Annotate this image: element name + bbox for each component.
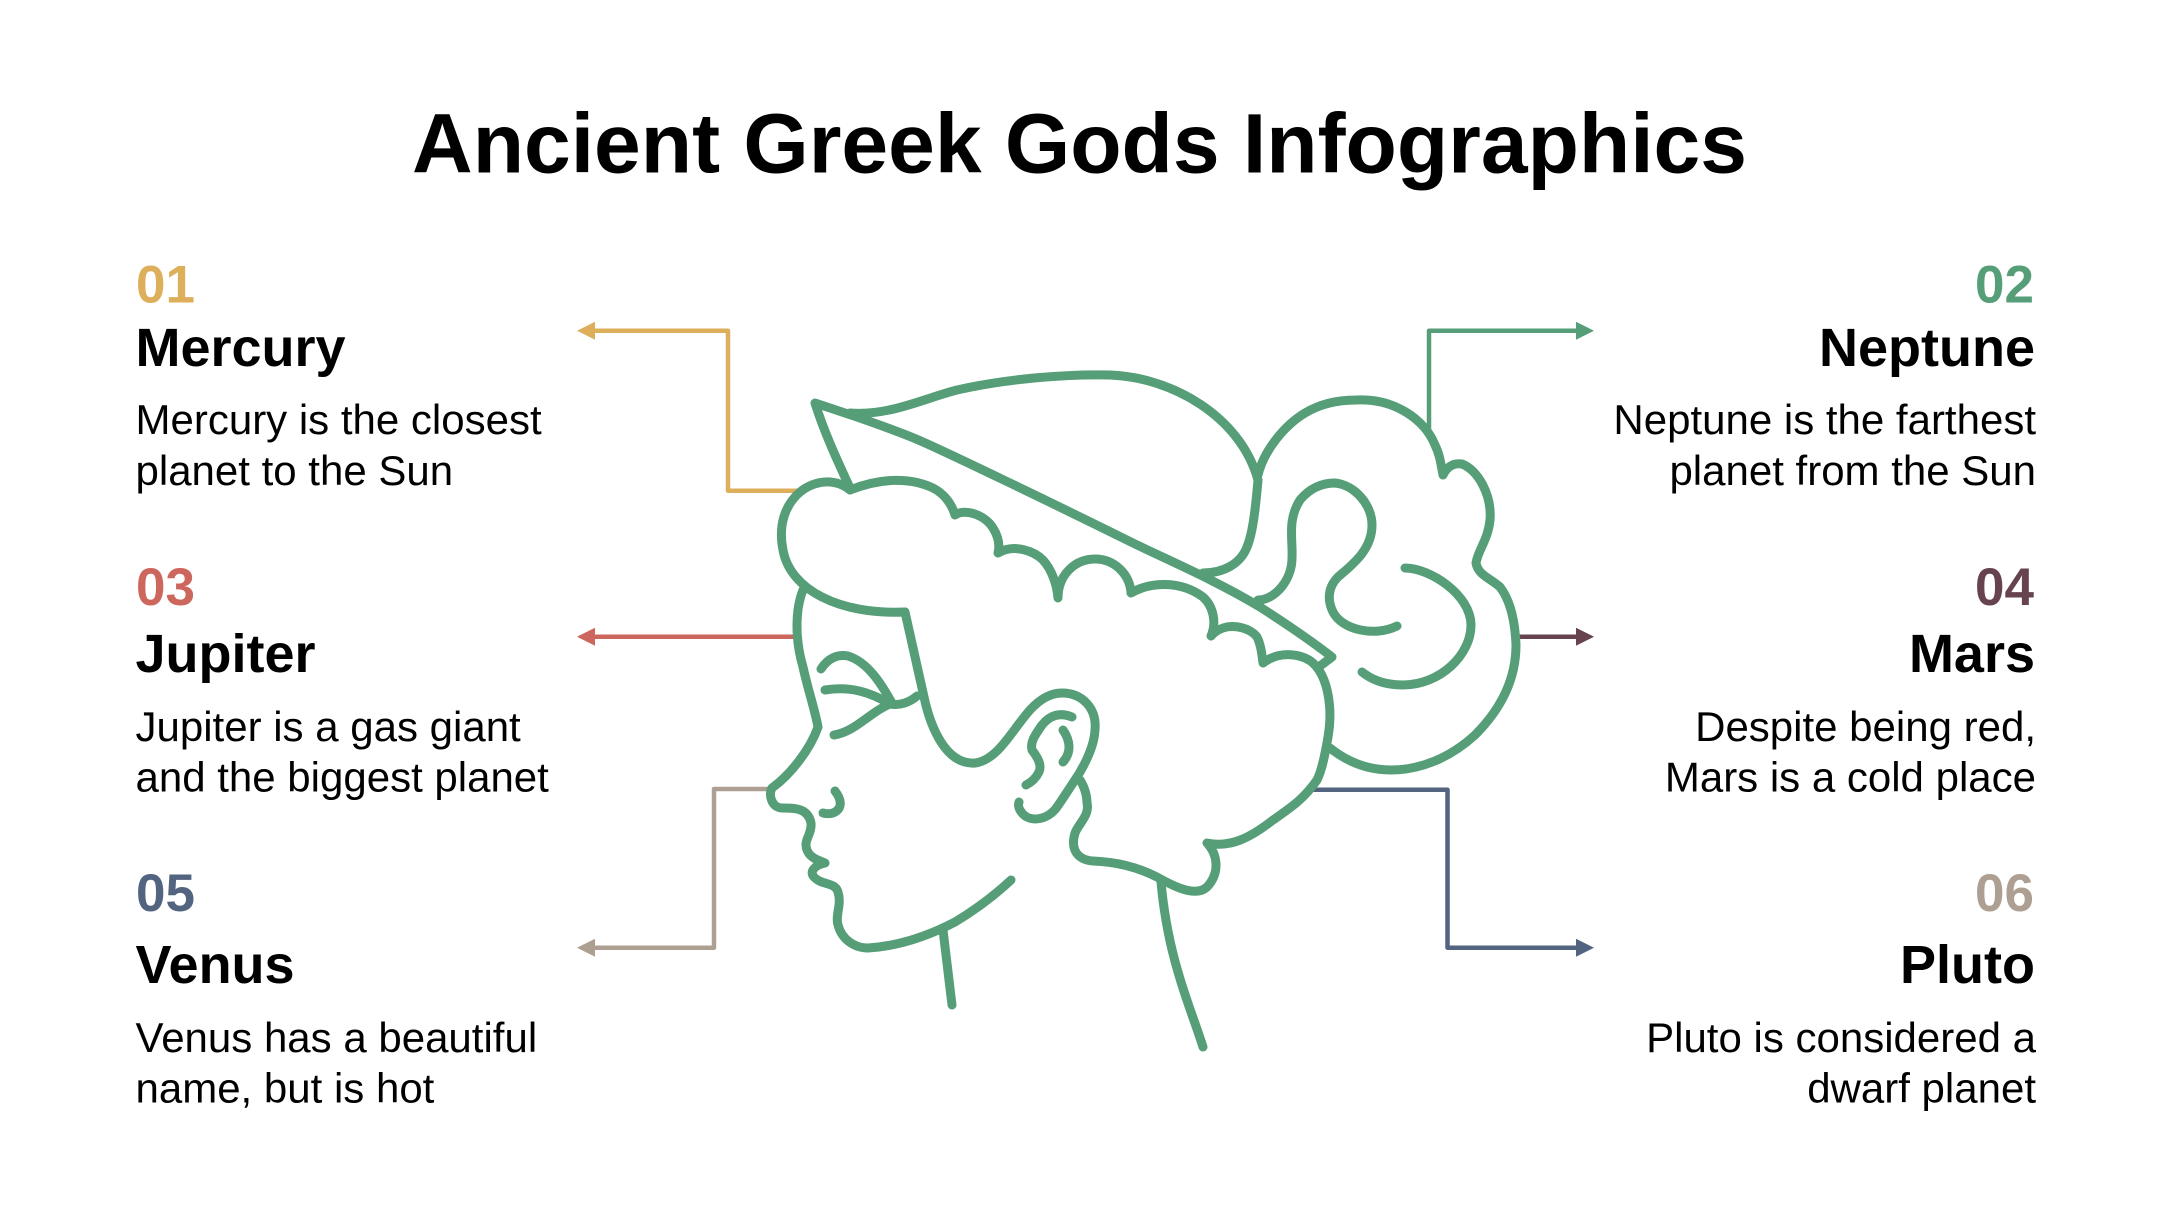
panel: 04 Mars: Mars is a cold place	[1665, 754, 2036, 800]
panel: 05 Venus: 05	[136, 864, 195, 923]
panel: 01 Mercury: planet to the Sun	[136, 447, 453, 494]
panel: 05 Venus: Venus has a beautiful	[136, 1014, 537, 1061]
panel: 06 Pluto: dwarf planet	[1807, 1064, 2036, 1112]
panel: 03 Jupiter: and the biggest planet	[136, 754, 549, 800]
arrow: Mars	[1519, 628, 1594, 646]
title: Ancient Greek Gods Infographics	[412, 96, 1747, 190]
panel: 06 Pluto: Pluto	[1900, 935, 2035, 995]
panel: 01 Mercury: Mercury is the closest	[136, 396, 542, 443]
panel: 06 Pluto: Pluto is considered a	[1646, 1014, 2037, 1061]
arrow: Pluto	[1312, 790, 1594, 957]
panel: 01 Mercury: Mercury	[136, 318, 346, 378]
panel: 05 Venus	[136, 864, 537, 1112]
arrow: Jupiter	[577, 628, 797, 646]
panel: 02 Neptune: planet from the Sun	[1669, 447, 2036, 494]
panel: 01 Mercury: 01	[136, 256, 195, 314]
panel: 02 Neptune: Neptune is the farthest	[1613, 396, 2036, 443]
panel: 06 Pluto	[1646, 864, 2037, 1112]
panel: 04 Mars: Mars	[1909, 624, 2035, 684]
arrow: Neptune	[1429, 322, 1594, 437]
arrow: Mercury	[577, 322, 799, 491]
panel: 02 Neptune: 02	[1975, 256, 2034, 314]
panel: 03 Jupiter: Jupiter is a gas giant	[136, 703, 521, 750]
arrow: Venus	[577, 789, 772, 957]
panel: 03 Jupiter	[136, 558, 549, 800]
panel: 05 Venus: Venus	[136, 935, 295, 995]
panel: 04 Mars	[1665, 558, 2036, 800]
panel: 02 Neptune	[1613, 256, 2036, 494]
panel: 03 Jupiter: Jupiter	[136, 624, 316, 684]
panel: 01 Mercury	[136, 256, 542, 494]
icon: Greek god head outline	[770, 375, 1516, 1047]
panel: 04 Mars: Despite being red,	[1695, 703, 2036, 750]
panel: 05 Venus: name, but is hot	[136, 1064, 435, 1112]
panel: 04 Mars: 04	[1975, 558, 2035, 617]
panel: 03 Jupiter: 03	[136, 558, 195, 617]
panel: 06 Pluto: 06	[1975, 864, 2034, 923]
panel: 02 Neptune: Neptune	[1819, 318, 2035, 378]
